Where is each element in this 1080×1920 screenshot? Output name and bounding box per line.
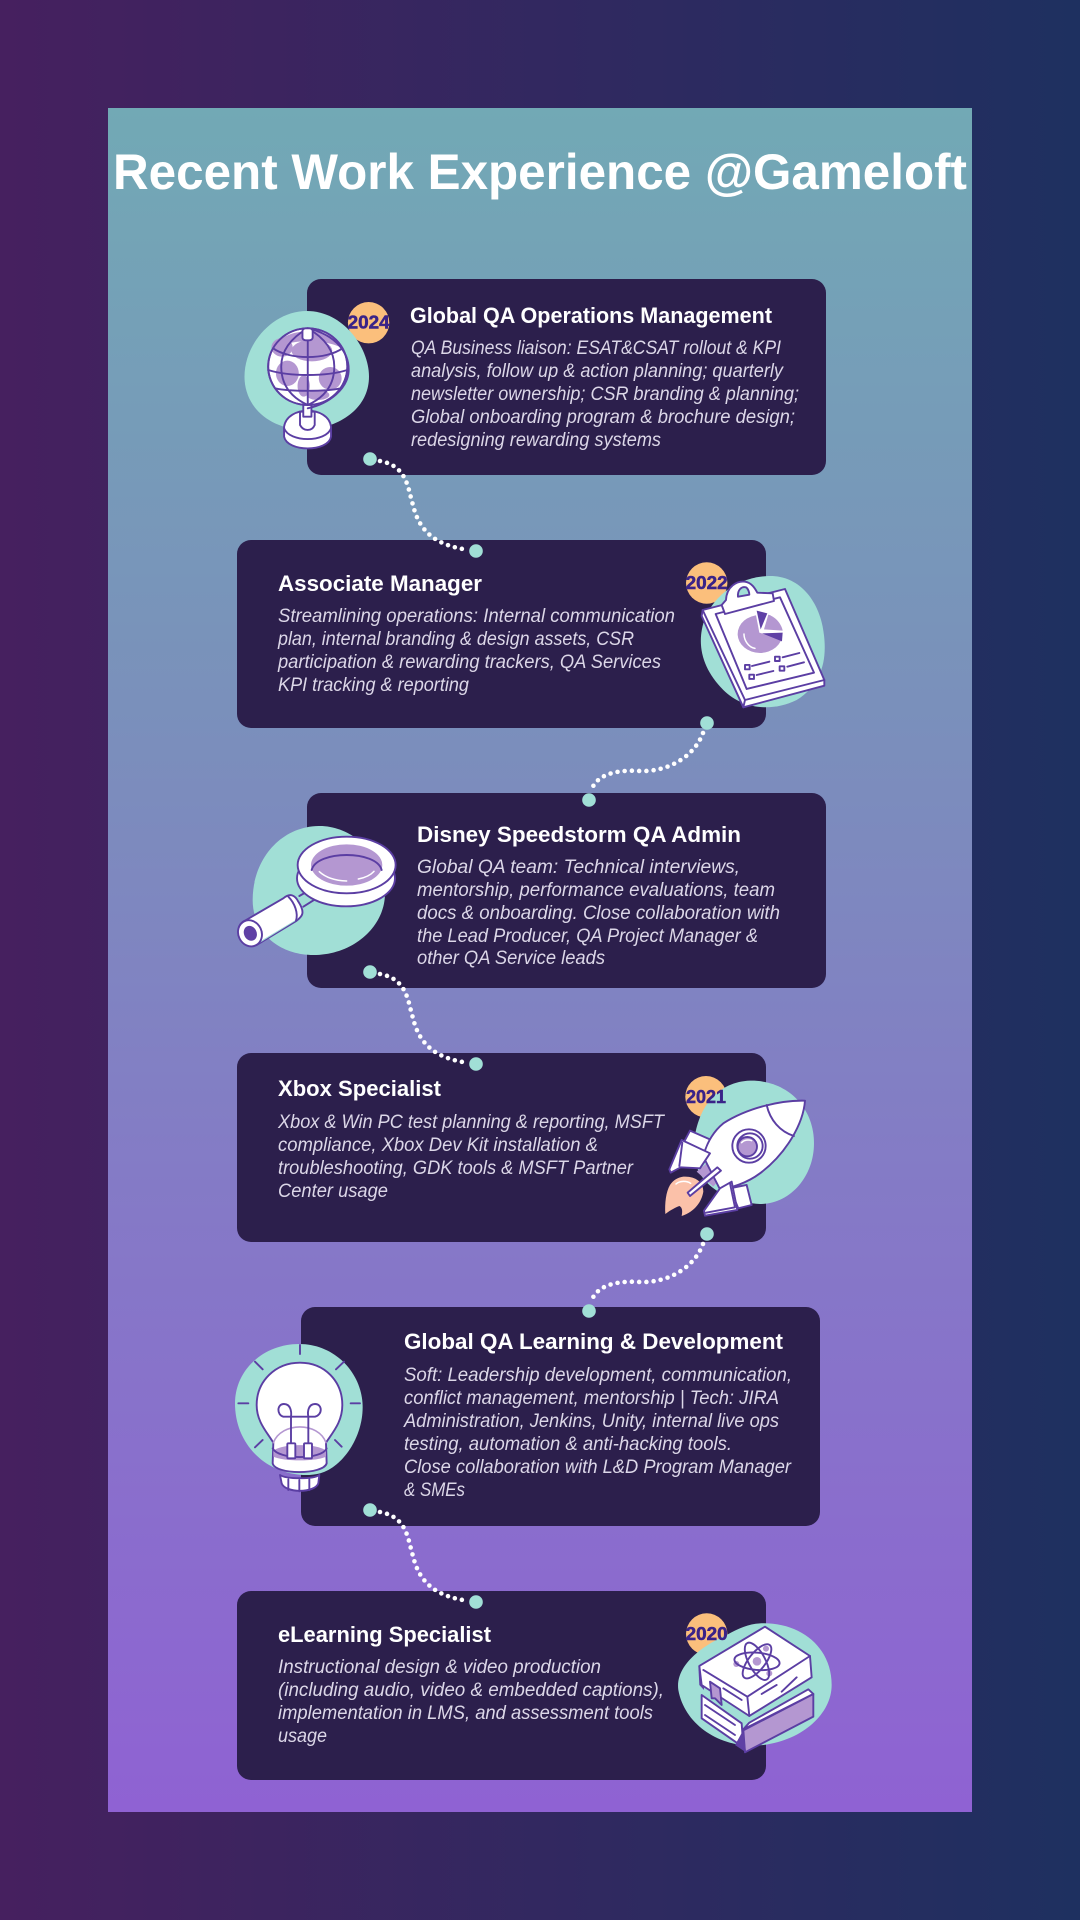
body text: implementation in LMS, and assessment tools bbox=[278, 1703, 653, 1724]
body text: Close collaboration with L&D Program Manager bbox=[404, 1457, 792, 1478]
body text: troubleshooting, GDK tools & MSFT Partner bbox=[278, 1158, 634, 1179]
panel: Global QA Operations Management bbox=[244, 279, 826, 475]
body text: other QA Service leads bbox=[417, 948, 605, 969]
body text: conflict management, mentorship | Tech: JIRA bbox=[404, 1388, 779, 1409]
body text bbox=[411, 338, 799, 451]
body text: Administration, Jenkins, Unity, internal live ops bbox=[403, 1411, 779, 1432]
body text bbox=[277, 1112, 665, 1202]
body text: redesigning rewarding systems bbox=[411, 430, 661, 451]
panel: Xbox Specialist bbox=[237, 1053, 814, 1242]
icon: globe bbox=[244, 311, 369, 448]
panel: Disney Speedstorm QA Admin bbox=[234, 793, 826, 988]
connector: card 1 to card 2 bbox=[363, 452, 483, 558]
body text: KPI tracking & reporting bbox=[278, 675, 469, 696]
body text: newsletter ownership; CSR branding & planning; bbox=[411, 384, 799, 405]
body text: (including audio, video & embedded captions), bbox=[278, 1680, 664, 1701]
connector: card 2 to card 3 bbox=[582, 716, 714, 807]
icon: magnifying glass bbox=[234, 826, 396, 955]
body text bbox=[417, 857, 780, 969]
body text: mentorship, performance evaluations, team bbox=[417, 880, 775, 901]
year badge: 2024 bbox=[348, 302, 389, 343]
panel: Associate Manager bbox=[237, 540, 825, 728]
icon: stacked books with atom bbox=[678, 1623, 832, 1752]
body text: compliance, Xbox Dev Kit installation & bbox=[278, 1135, 598, 1156]
panel: eLearning Specialist bbox=[237, 1591, 832, 1780]
body text: Xbox & Win PC test planning & reporting, MSFT bbox=[277, 1112, 665, 1133]
body text bbox=[277, 606, 675, 696]
panel: Global QA Learning & Development bbox=[235, 1307, 820, 1526]
year label: 2020: 2020 bbox=[686, 1624, 728, 1644]
body text: analysis, follow up & action planning; quarterly bbox=[411, 361, 784, 382]
body text bbox=[278, 1657, 664, 1747]
year badge: 2022 bbox=[686, 562, 727, 604]
body text: Center usage bbox=[278, 1181, 388, 1202]
body text: Global onboarding program & brochure design; bbox=[411, 407, 795, 428]
body text: Streamlining operations: Internal communication bbox=[278, 606, 675, 627]
year label: 2021: 2021 bbox=[686, 1087, 726, 1107]
year label: 2024: 2024 bbox=[348, 312, 390, 332]
connector: card 4 to card 5 bbox=[582, 1227, 714, 1318]
body text bbox=[403, 1365, 792, 1501]
title: Recent Work Experience @Gameloft bbox=[113, 144, 967, 200]
heading: Xbox Specialist bbox=[278, 1076, 442, 1101]
icon: clipboard with pie chart bbox=[701, 576, 825, 707]
body text: QA Business liaison: ESAT&CSAT rollout & KPI bbox=[411, 338, 782, 359]
body text: docs & onboarding. Close collaboration with bbox=[417, 903, 780, 924]
body text: usage bbox=[278, 1726, 327, 1747]
heading: Associate Manager bbox=[278, 571, 482, 596]
body text: Soft: Leadership development, communication, bbox=[404, 1365, 792, 1386]
connector: card 5 to card 6 bbox=[363, 1503, 483, 1609]
year badge: 2020 bbox=[686, 1613, 727, 1655]
heading: Global QA Learning & Development bbox=[404, 1329, 784, 1354]
heading: Global QA Operations Management bbox=[410, 303, 773, 328]
heading: Disney Speedstorm QA Admin bbox=[417, 822, 741, 847]
icon: rocket bbox=[665, 1081, 814, 1216]
body text: Global QA team: Technical interviews, bbox=[417, 857, 740, 878]
body text: testing, automation & anti-hacking tools. bbox=[404, 1434, 732, 1455]
year badge: 2021 bbox=[685, 1076, 727, 1117]
connector: card 3 to card 4 bbox=[363, 965, 483, 1071]
body text: Instructional design & video production bbox=[278, 1657, 601, 1678]
main gradient panel bbox=[108, 108, 972, 1812]
icon: light bulb bbox=[235, 1344, 363, 1491]
body text: participation & rewarding trackers, QA Services bbox=[277, 652, 661, 673]
body text: & SMEs bbox=[404, 1480, 465, 1501]
year label: 2022: 2022 bbox=[686, 573, 728, 593]
body text: the Lead Producer, QA Project Manager & bbox=[417, 926, 758, 947]
heading: eLearning Specialist bbox=[278, 1622, 492, 1647]
body text: plan, internal branding & design assets, CSR bbox=[277, 629, 634, 650]
